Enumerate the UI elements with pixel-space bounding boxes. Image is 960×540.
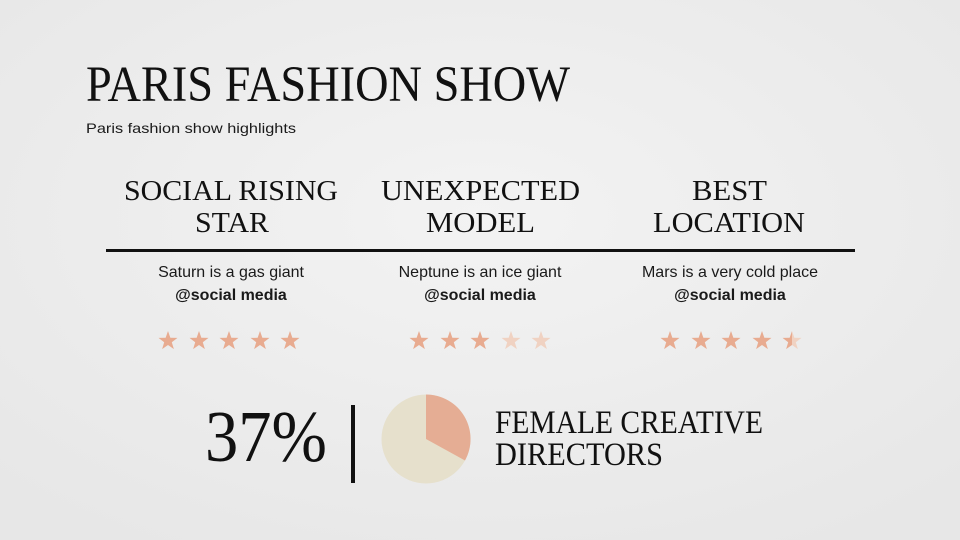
text: column 1: [158, 264, 304, 304]
label: female creative directors: [495, 405, 763, 473]
heading: best location: BEST: [692, 176, 767, 207]
text: column 2: [399, 264, 562, 304]
text: column 1: @social media: [175, 287, 287, 304]
text: column 2: Neptune is an ice giant: [399, 264, 562, 281]
heading: best location: [653, 176, 805, 239]
stat: 37%: 37%: [205, 396, 327, 477]
text: column 2: @social media: [424, 287, 536, 304]
heading: social rising star: [124, 176, 338, 239]
heading: unexpected model: [381, 176, 580, 239]
stars: column 3: [660, 331, 802, 349]
heading: social rising star: SOCIAL RISING: [124, 176, 338, 207]
label: female creative directors: FEMALE CREATIVE: [495, 405, 763, 441]
stars: column 2: [410, 331, 550, 349]
text: column 1: Saturn is a gas giant: [158, 264, 304, 281]
label: female creative directors: DIRECTORS: [495, 437, 663, 473]
subtitle: Paris fashion show highlights: [86, 120, 296, 136]
divider bar: [351, 405, 355, 483]
heading: social rising star: STAR: [195, 208, 269, 239]
title: PARIS FASHION SHOW: [86, 57, 571, 113]
text: column 3: @social media: [674, 287, 786, 304]
text: column 3: Mars is a very cold place: [642, 264, 818, 281]
text: column 3: [642, 264, 818, 304]
heading: unexpected model: MODEL: [426, 208, 535, 239]
heading: best location: LOCATION: [653, 208, 805, 239]
pie chart: [382, 394, 471, 484]
heading: unexpected model: UNEXPECTED: [381, 176, 580, 207]
stars: column 1: [158, 331, 300, 349]
